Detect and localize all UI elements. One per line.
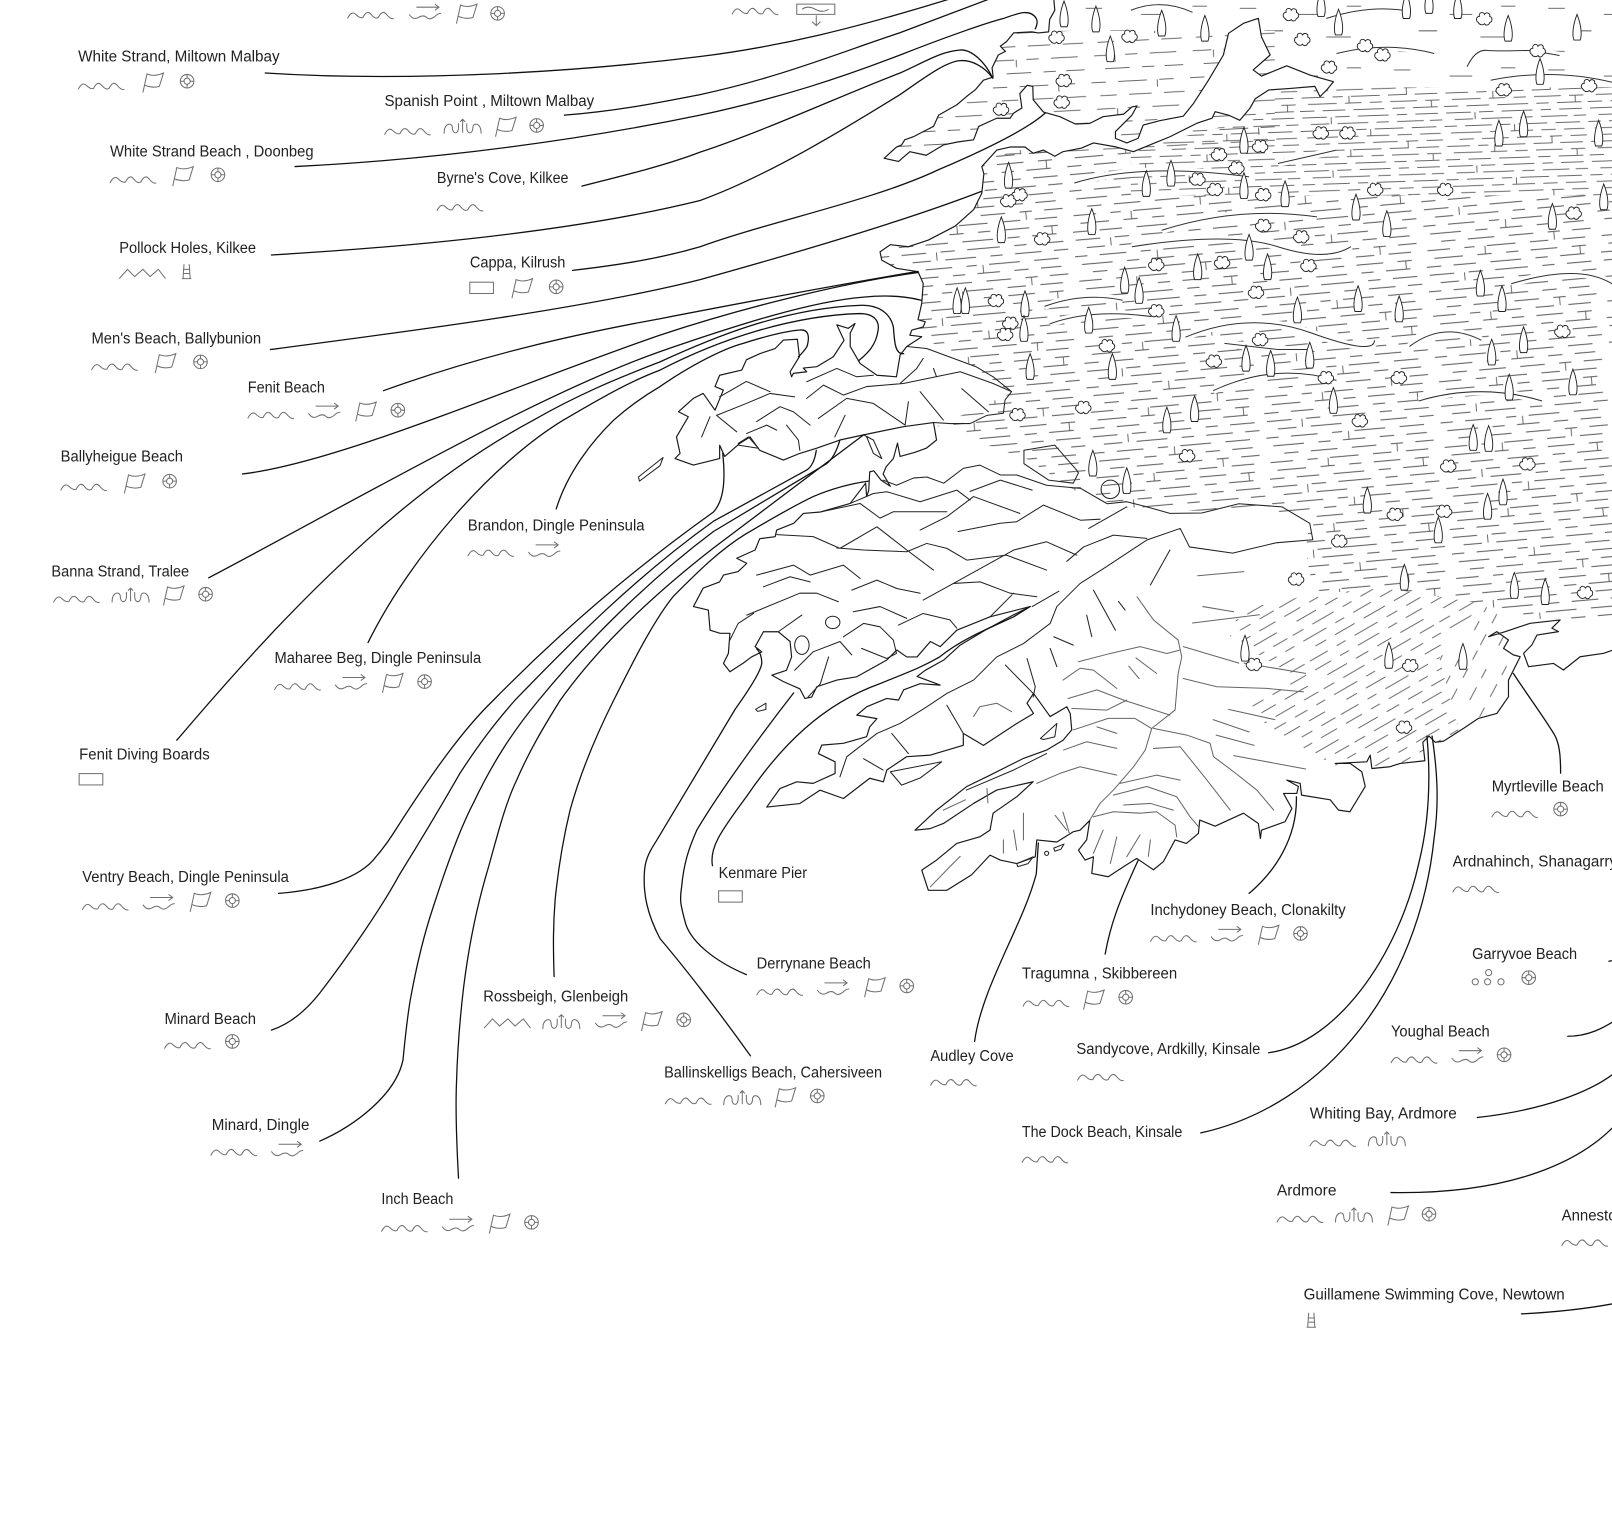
- beach: Maharee Beg, Dingle Peninsula: Maharee Beg, Dingle Peninsula: [274, 650, 482, 667]
- leader lines from beach labels to the coast: [177, 0, 1612, 1314]
- beach: Audley Cove: Audley Cove: [930, 1048, 1014, 1065]
- beach: Tragumna, Skibbereen: [1022, 966, 1177, 1010]
- beach: Brandon, Dingle Peninsula: Brandon, Dingle Peninsula: [468, 517, 645, 534]
- beach: Minard, Dingle: Minard, Dingle: [212, 1117, 309, 1134]
- trees: [953, 0, 1608, 669]
- beach: Guillamene Swimming Cove, Newtown: [1304, 1286, 1565, 1327]
- beach: Rossbeigh, Glenbeigh: Rossbeigh, Glenbeigh: [483, 988, 628, 1005]
- beach: The Dock Beach, Kinsale: The Dock Beach, Kinsale: [1022, 1124, 1182, 1141]
- lakes and islands: [638, 445, 1078, 867]
- beach: Audley Cove: [930, 1048, 1014, 1086]
- icons: top row with diving platform: [732, 4, 835, 26]
- beach: Sandycove, Ardkilly, Kinsale: [1076, 1041, 1260, 1081]
- beach: Whiting Bay, Ardmore: [1310, 1106, 1457, 1146]
- beach: Fenit Beach: Fenit Beach: [248, 380, 325, 397]
- beach: Ballyheigue Beach: [61, 449, 183, 493]
- farmland hatching: [874, 0, 1612, 766]
- beach: Inchydoney Beach, Clonakilty: [1150, 902, 1346, 945]
- beach: Inchydoney Beach, Clonakilty: Inchydoney Beach, Clonakilty: [1150, 902, 1346, 919]
- beach: Spanish Point, Miltown Malbay: [384, 93, 595, 137]
- landmass fill: [675, 0, 1612, 890]
- icons: top row, beach label cropped: [347, 4, 504, 24]
- hill lines on the plain: [1045, 5, 1612, 401]
- beach: Myrtleville Beach: [1492, 779, 1604, 817]
- beach: Minard Beach: Minard Beach: [164, 1011, 256, 1028]
- beach: Ballinskelligs Beach, Cahersiveen: [664, 1064, 882, 1107]
- coast outline: [675, 0, 1612, 890]
- beach: Whiting Bay, Ardmore: Whiting Bay, Ardmore: [1310, 1106, 1457, 1123]
- gray valley lines: West Cork: [930, 572, 1306, 887]
- beach: Fenit Diving Boards: [79, 747, 210, 785]
- beach: White Strand Beach, Doonbeg: [110, 143, 314, 186]
- beach: Derrynane Beach: [757, 955, 914, 997]
- beach: Men's Beach, Ballybunion: [91, 330, 261, 373]
- beach: Cappa, Kilrush: [470, 254, 565, 298]
- beach: Ballinskelligs Beach, Cahersiveen: Ballinskelligs Beach, Cahersiveen: [664, 1064, 882, 1081]
- beach: Maharee Beg, Dingle Peninsula: [274, 650, 482, 693]
- beach: Rossbeigh, Glenbeigh: [483, 988, 690, 1031]
- beach: Minard Beach: [164, 1011, 256, 1049]
- beach: Myrtleville Beach: Myrtleville Beach: [1492, 779, 1604, 796]
- beach: Ardnahinch, Shanagarry: [1453, 854, 1612, 893]
- beach: White Strand, Miltown Malbay: [78, 49, 280, 93]
- beach: Ardmore: [1277, 1183, 1436, 1225]
- mountain ridges: Dingle peninsula: [702, 346, 1012, 459]
- beach: White Strand Beach, Doonbeg: White Strand Beach , Doonbeg: [110, 143, 314, 160]
- beach: Garryvoe Beach: [1472, 946, 1577, 985]
- beach: Kenmare Pier: Kenmare Pier: [719, 865, 807, 882]
- beach: Byrne's Cove, Kilkee: [437, 170, 569, 211]
- beach: Tragumna, Skibbereen: Tragumna , Skibbereen: [1022, 966, 1177, 983]
- beach: Byrne's Cove, Kilkee: Byrne's Cove, Kilkee: [437, 170, 569, 187]
- map: south-west Ireland coastline and landscape: [638, 0, 1612, 890]
- bushes: [988, 8, 1597, 733]
- beach: Ardmore: Ardmore: [1277, 1183, 1336, 1200]
- beach: Kenmare Pier: [719, 865, 807, 902]
- beach: Cappa, Kilrush: Cappa, Kilrush: [470, 254, 565, 271]
- beach: Fenit Diving Boards: Fenit Diving Boards: [79, 747, 210, 764]
- beach: Inch Beach: [381, 1191, 538, 1234]
- beach: Youghal Beach: [1391, 1023, 1511, 1063]
- beach: Banna Strand, Tralee: [51, 564, 212, 606]
- beach: Youghal Beach: Youghal Beach: [1391, 1023, 1490, 1040]
- mountain ridges: Iveragh peninsula: [730, 465, 1313, 790]
- beach: Minard, Dingle: [211, 1117, 309, 1156]
- tarns and Lough Currane: [795, 480, 1120, 654]
- beach: Spanish Point, Miltown Malbay: Spanish Point , Miltown Malbay: [384, 93, 595, 110]
- beach: Fenit Beach: [248, 380, 405, 422]
- beach: Inch Beach: Inch Beach: [381, 1191, 453, 1208]
- beach: Ballyheigue Beach: Ballyheigue Beach: [61, 449, 183, 466]
- beach: Men's Beach, Ballybunion: Men's Beach, Ballybunion: [91, 330, 261, 347]
- beach: Brandon, Dingle Peninsula: [468, 517, 645, 556]
- beach: Garryvoe Beach: Garryvoe Beach: [1472, 946, 1577, 963]
- beach: Guillamene Swimming Cove, Newtown: Guillamene Swimming Cove, Newtown: [1304, 1286, 1565, 1303]
- beach: Pollock Holes, Kilkee: Pollock Holes, Kilkee: [119, 240, 256, 257]
- beach: Ventry Beach, Dingle Peninsula: Ventry Beach, Dingle Peninsula: [82, 869, 289, 886]
- beach: Annestown, cropped at page edge: [1562, 1207, 1612, 1246]
- beach: Sandycove, Ardkilly, Kinsale: Sandycove, Ardkilly, Kinsale: [1076, 1041, 1260, 1058]
- beach: Banna Strand, Tralee: Banna Strand, Tralee: [51, 564, 189, 581]
- beach: Ventry Beach, Dingle Peninsula: [82, 869, 289, 912]
- beach: The Dock Beach, Kinsale: [1022, 1124, 1182, 1163]
- beach: Derrynane Beach: Derrynane Beach: [757, 955, 871, 972]
- beach: White Strand, Miltown Malbay: White Strand, Miltown Malbay: [78, 49, 280, 66]
- beach: Pollock Holes, Kilkee: [119, 240, 256, 279]
